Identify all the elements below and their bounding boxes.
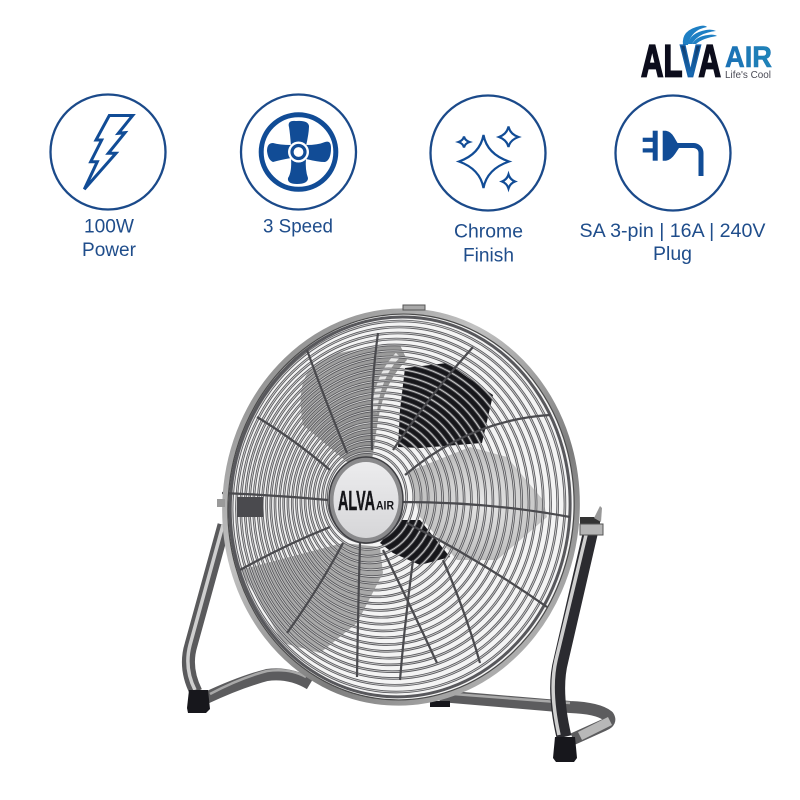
hub logo text: ALVA	[338, 485, 375, 516]
wire grille rings	[217, 306, 583, 708]
label: 3 Speed: 3 Speed	[263, 216, 333, 238]
feature: 3 speed	[241, 94, 356, 238]
grille spokes	[222, 333, 570, 680]
icon: lightning bolt	[50, 94, 166, 210]
logo wings	[683, 26, 717, 45]
label: plug specification: Plug	[653, 243, 692, 265]
left pivot bracket	[217, 497, 263, 517]
hub with logo: AIR	[376, 498, 394, 512]
blade highlight	[374, 355, 398, 412]
logo tagline: Life's Cool	[725, 69, 771, 81]
label: plug specification	[580, 220, 766, 265]
icon: plug	[616, 96, 730, 210]
label: 100W Power	[82, 216, 136, 261]
blade: right	[407, 447, 547, 560]
icon: fan	[241, 94, 356, 210]
label: Chrome Finish: Chrome	[454, 220, 523, 242]
motor shadow lower	[380, 520, 450, 565]
feature: chrome finish	[430, 96, 546, 266]
fan stand	[188, 525, 610, 739]
logo AIR: AIR	[725, 41, 772, 74]
right pivot bracket	[580, 506, 603, 535]
fan disc background	[211, 298, 591, 716]
label: 100W Power: Power	[82, 239, 136, 261]
label: 100W Power: 100W	[84, 216, 135, 238]
fan blades and motor	[240, 345, 547, 653]
feature: 100W power	[50, 94, 166, 261]
feature: plug	[580, 96, 766, 265]
product: chrome floor fan	[187, 298, 610, 762]
label: Chrome Finish	[454, 220, 523, 266]
fan outer rim	[212, 299, 590, 715]
motor shadow upper	[398, 363, 493, 448]
stand feet	[187, 690, 577, 762]
hub with logo	[329, 457, 403, 543]
icon: sparkles	[430, 96, 546, 210]
label: Chrome Finish: Finish	[463, 244, 514, 266]
label: plug specification: SA 3-pin | 16A | 240V	[580, 220, 766, 242]
blade: top left	[301, 345, 407, 462]
brand logo	[641, 26, 772, 87]
logo wordmark: ALVA	[641, 36, 721, 86]
rim top clip	[403, 305, 425, 310]
blade: bottom left	[240, 543, 383, 653]
